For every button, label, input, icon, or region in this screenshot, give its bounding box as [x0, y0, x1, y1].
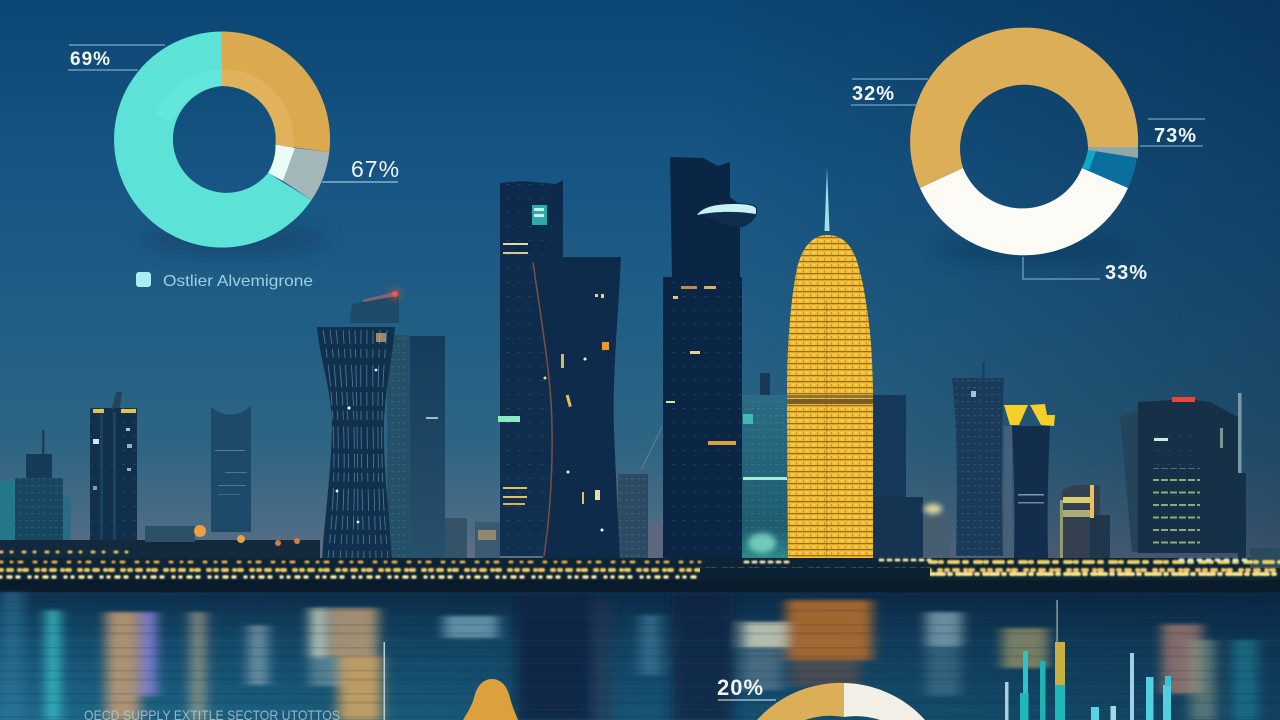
skyline: twisted tower right: [952, 362, 1004, 556]
segment: gold: [910, 28, 1138, 188]
callout: 32%: [851, 79, 928, 105]
skyline: haze towers behind flared tower: [350, 296, 445, 561]
skyline: twisted twin tower front: [533, 257, 621, 558]
skyline: stepped twin tower rear: [498, 180, 563, 556]
skyline: flared lattice tower: [317, 327, 395, 561]
donut chart: top right: [910, 28, 1138, 264]
skyline: gold landmark tower: [787, 168, 873, 571]
skyline: dark block right of gold tower: [873, 395, 950, 561]
callout: 69%: [68, 45, 165, 70]
skyline: teal mid building: [742, 373, 788, 561]
skyline: far left cluster: [0, 430, 71, 547]
callout: 73%: 73%: [1154, 125, 1197, 147]
water ripple banding: [0, 592, 1280, 720]
segment: white: [920, 168, 1128, 255]
legend: donut key: Ostlier Alvemigrone: [163, 273, 313, 290]
segment: grey sliver: [1088, 147, 1138, 158]
segment: grey: [283, 148, 329, 200]
segment: cyan inner: [1082, 150, 1096, 170]
bar chart: bottom right: [1005, 600, 1171, 720]
callout: 67%: 67%: [351, 156, 400, 182]
skyline: concave-top tower: [211, 406, 251, 532]
skyline: saucer tower: [663, 157, 757, 570]
water surface: [0, 592, 1280, 720]
segment: gold: [222, 31, 330, 152]
callout: 73%: [1140, 119, 1205, 147]
segment: gold: [757, 683, 844, 720]
callout: 33%: [1023, 257, 1148, 284]
segment: white: [844, 683, 925, 720]
skyline: low gold-lit building: [1060, 485, 1110, 560]
callout: 32%: 32%: [852, 83, 895, 105]
segment: inner teal highlight: [156, 69, 222, 122]
donut chart: bottom centre: [757, 683, 925, 720]
donut chart: top left: [114, 31, 330, 256]
skyline: wide dark tower with red top: [1120, 393, 1246, 560]
icon: red beacon: [362, 287, 402, 302]
icon: gold silhouette: [463, 679, 518, 720]
skyline: low-rise band left: [0, 525, 320, 570]
callout: 33%: 33%: [1105, 262, 1148, 284]
skyline: gold crown tower: [1004, 404, 1055, 558]
segment: inner gold highlight: [222, 69, 293, 148]
callout: 67%: [322, 156, 400, 182]
callout: 20%: 20%: [717, 675, 764, 700]
segment: blue: [1082, 150, 1137, 188]
segment: teal: [114, 32, 312, 247]
skyline: small mid buildings: [445, 427, 664, 562]
shoreline with city lights: [0, 548, 1280, 594]
water reflections: [0, 592, 1258, 720]
skyline: tower with gold crown lights: [90, 392, 137, 544]
callout: 69%: 69%: [70, 49, 111, 70]
segment: white: [268, 145, 295, 181]
